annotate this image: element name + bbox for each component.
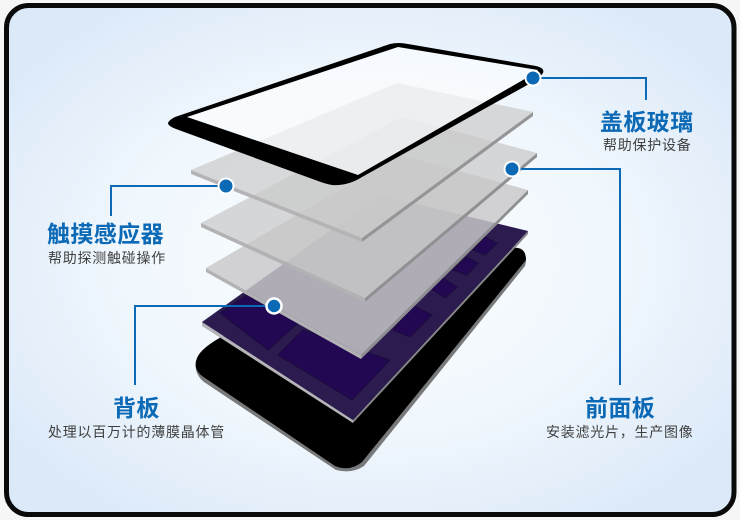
callout: backplane: 处理以百万计的薄膜晶体管 (48, 424, 225, 440)
layer: purple front panel (202, 195, 528, 423)
layer: touch sensor sheet (191, 83, 533, 242)
layer: third glass sheet (206, 155, 528, 359)
callout: backplane (48, 298, 282, 440)
callout: backplane: 背板 (113, 395, 160, 421)
layer: black base (196, 248, 526, 471)
callout: front panel: 前面板 (585, 395, 655, 421)
callout: touch sensor: 帮助探测触碰操作 (48, 250, 166, 266)
layer: second glass sheet (201, 117, 537, 302)
layer: cover glass (168, 43, 543, 185)
exploded display layers (168, 43, 543, 471)
callout: cover glass (526, 70, 694, 153)
callout: cover glass: 帮助保护设备 (603, 137, 692, 153)
callout: front panel: 安装滤光片，生产图像 (546, 424, 694, 440)
callout: front panel (504, 162, 694, 440)
callout: touch sensor: 触摸感应器 (47, 221, 164, 247)
pixel blocks (220, 237, 497, 400)
callout: touch sensor (47, 178, 234, 266)
callout: cover glass: 盖板玻璃 (600, 109, 694, 135)
